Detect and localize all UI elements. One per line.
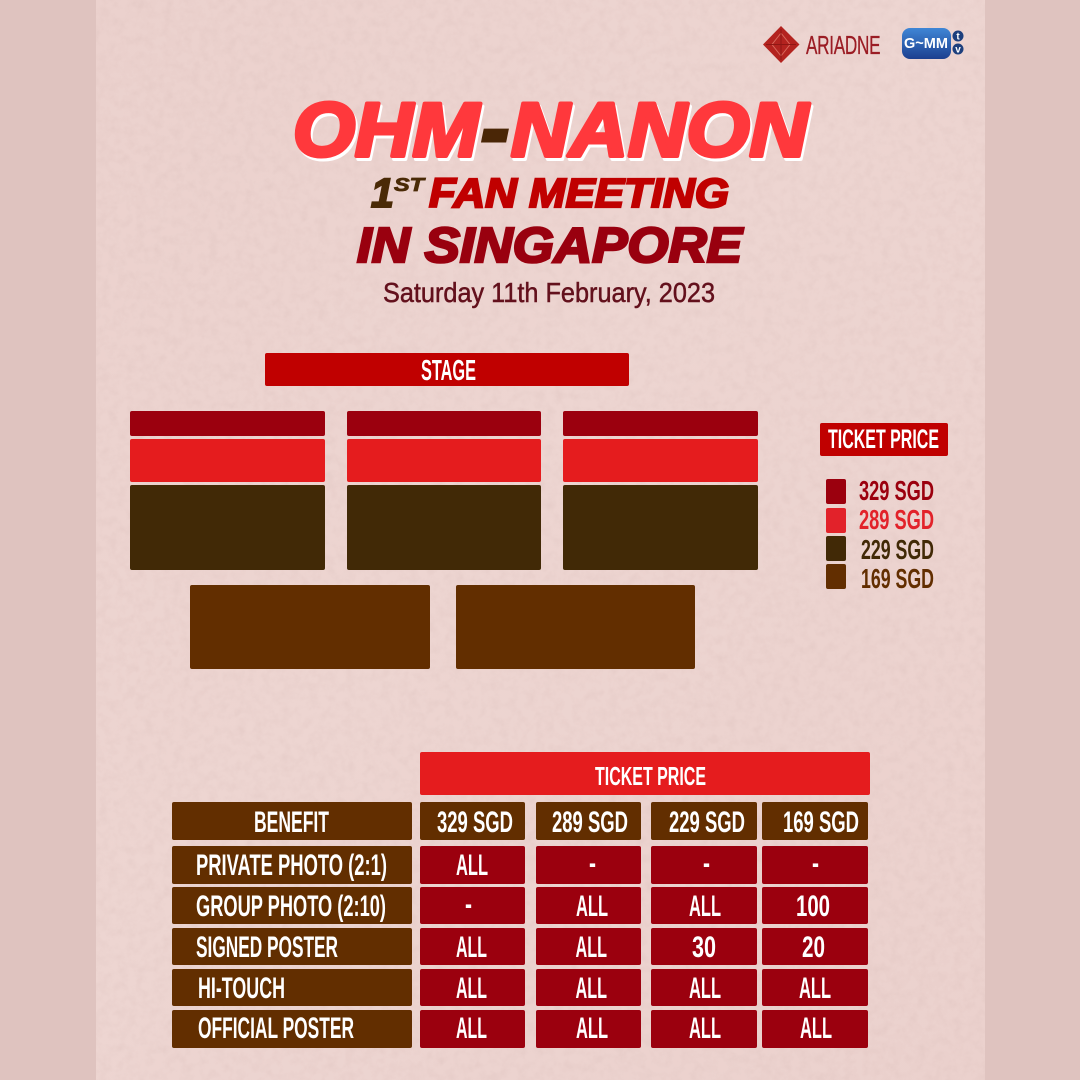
icon: Ariadne diamond [763, 26, 800, 63]
table row: header: 329 SGD [437, 806, 513, 839]
title hyphen: - [482, 88, 508, 171]
icon: tv circles: v [955, 44, 961, 56]
text: GMM wordmark: G~MM [904, 35, 948, 52]
table row: group photo: - [465, 888, 472, 921]
table row: official poster: ALL [576, 1012, 608, 1045]
table row: signed poster [172, 928, 868, 965]
title face: NANON [511, 88, 810, 173]
table row: private photo: ALL [456, 849, 488, 882]
icon: tv circles [952, 30, 964, 56]
icon: GMM badge [902, 28, 951, 59]
table row: header: 229 SGD [669, 806, 745, 839]
title shadow: NANON [513, 91, 812, 176]
legend item: 329 SGD [826, 475, 934, 506]
table row: private photo [172, 846, 868, 884]
title face: OHM [293, 88, 481, 173]
legend: ticket price [820, 423, 948, 594]
icon: tv circles: t [956, 32, 960, 42]
legend heading [820, 423, 948, 456]
table row: official poster: ALL [800, 1012, 832, 1045]
table row: header: 169 SGD [783, 806, 859, 839]
legend heading: TICKET PRICE [828, 424, 939, 454]
title face [293, 88, 810, 173]
table row: signed poster: 30 [692, 931, 716, 964]
table row: hi-touch [172, 969, 868, 1006]
table row: official poster [172, 1010, 868, 1048]
table row: signed poster: 20 [802, 931, 825, 964]
subtitle: In Singapore: IN SINGAPORE [357, 219, 743, 273]
table row: group photo: GROUP PHOTO (2:10) [196, 890, 386, 923]
table heading: ticket price: TICKET PRICE [595, 761, 706, 791]
logo: Ariadne [763, 26, 881, 63]
table row: group photo [172, 887, 868, 924]
table row: group photo: 100 [796, 890, 830, 923]
table row: private photo: - [703, 847, 710, 880]
table row: hi-touch: ALL [576, 972, 607, 1005]
text: FAN MEETING: FAN MEETING [429, 170, 729, 216]
legend item: 329 SGD: 329 SGD [859, 475, 934, 506]
table row: signed poster: SIGNED POSTER [196, 931, 338, 964]
table row: official poster: ALL [456, 1012, 487, 1045]
seating: 229 SGD blocks [130, 485, 758, 570]
text: Ariadne wordmark: ARIADNE [806, 30, 881, 60]
table row: official poster: OFFICIAL POSTER [198, 1012, 354, 1045]
legend item: 169 SGD [826, 563, 934, 594]
benefit table [172, 752, 870, 1048]
table row: signed poster: ALL [456, 931, 487, 964]
title shadow: OHM [295, 91, 483, 176]
title shadow [295, 91, 812, 176]
table row: official poster: ALL [689, 1012, 721, 1045]
seating: 329 SGD blocks [130, 411, 758, 436]
table row: hi-touch: ALL [689, 972, 721, 1005]
seating: 169 SGD blocks [190, 585, 695, 669]
table row: group photo: ALL [689, 890, 721, 923]
seating: 289 SGD blocks [130, 439, 758, 482]
table row: header: 289 SGD [552, 806, 628, 839]
logo: GMM TV [902, 28, 964, 59]
legend item: 229 SGD: 229 SGD [861, 534, 934, 565]
table row: header [172, 802, 868, 840]
seat map [130, 353, 758, 669]
legend item: 229 SGD [826, 534, 934, 565]
text: ST: ST [394, 175, 427, 195]
table row: private photo: PRIVATE PHOTO (2:1) [196, 849, 387, 882]
legend item: 289 SGD [826, 504, 934, 535]
table row: hi-touch: HI-TOUCH [198, 972, 285, 1005]
table row: header: BENEFIT [254, 806, 329, 839]
subtitle: 1st Fan Meeting [371, 170, 729, 216]
title: OHM-NANON [293, 88, 812, 176]
table heading: ticket price [420, 752, 870, 795]
table row: private photo: - [589, 847, 596, 880]
table row: hi-touch: ALL [456, 972, 487, 1005]
legend item: 169 SGD: 169 SGD [861, 563, 934, 594]
table row: private photo: - [812, 847, 819, 880]
table row: hi-touch: ALL [799, 972, 831, 1005]
text: 1: 1 [371, 170, 394, 216]
stage: STAGE [421, 355, 476, 387]
stage [265, 353, 629, 387]
legend item: 289 SGD: 289 SGD [859, 504, 934, 535]
table row: signed poster: ALL [576, 931, 607, 964]
table row: group photo: ALL [576, 890, 608, 923]
text: event date: Saturday 11th February, 2023 [383, 277, 715, 308]
